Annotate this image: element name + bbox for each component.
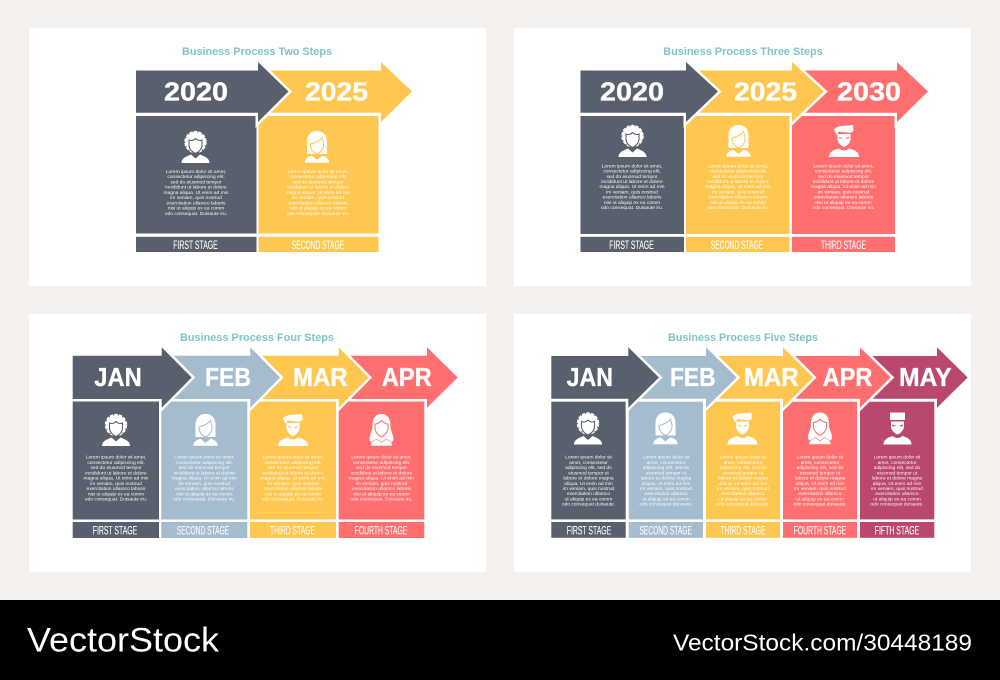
step card: second stage [629,402,703,538]
body text: Lorem ipsum dolor sit amet, [86,455,146,461]
icon: curly hair person [182,132,210,163]
body text: im veniam, quis nostrud [606,189,658,195]
body text: odo consequat duisaute. [716,502,770,508]
body text: odo consequat. Duisaute iru. [165,211,227,217]
footer bar [0,600,1000,680]
body text: exercitation ullamco laboris [288,200,348,206]
body text: amet, consectetur [569,460,608,466]
body text: sed do eiusmod tempor [606,174,658,180]
arrow: 2020 [580,62,718,122]
body text: consectetur adipiscing elit, [815,169,872,175]
body text: aliqua. Ut enim ad min [564,481,613,487]
body text: sed do eiusmod tempor [90,465,142,471]
body text: ut aliquip ex ea comm [565,496,612,502]
stage label: FOURTH STAGE [355,524,407,538]
body text: nisi ut aliquip ex ea comm [290,206,346,212]
body text: odo consequat. Duisaute iru. [707,205,769,211]
body text: labore et dolore magna [563,476,614,482]
body text: aliqua. Ut enim ad min [642,481,691,487]
arrow: APR: APR [382,364,432,392]
title: two steps: Business Process Two Steps [182,46,332,58]
body text: eiusmod tempor ut [877,470,918,476]
body text: magna aliqua. Ut enim ad min [706,184,771,190]
icon: man with flat top [884,412,912,444]
arrow: APR: APR [823,364,872,392]
body text: sed do eiusmod tempor [179,465,230,471]
body text: eiusmod tempor ut [646,470,687,476]
title: four steps: Business Process Four Steps [180,332,334,344]
body text: exercitation ullamco [875,491,919,497]
body text: consectetur adipiscing elit, [603,169,661,175]
arrow: MAR [250,347,368,408]
body text: exercitation ullamco laboris [264,486,323,492]
step card: second stage [258,116,378,252]
arrow: JAN [551,347,659,408]
body text: adipiscing elit, sed do [643,465,690,471]
body text: im veniam, quis nostrud [356,481,408,487]
body text: Lorem ipsum dolor sit amet, [602,163,662,169]
body text: exercitation ullamco laboris [602,195,662,201]
body text: aliqua. Ut enim ad min [873,481,922,487]
body text: exercitation ullamco [644,491,688,497]
body text: sed do eiusmod tempor [267,465,319,471]
body text: magna aliqua. Ut enim ad min [811,184,876,190]
icon: curly hair person [102,415,130,446]
body text: magna aliqua. Ut enim ad min [164,190,229,196]
arrow: JAN: JAN [94,364,142,392]
body text: odo consequat. Duisaute iru. [601,205,663,211]
stage label: SECOND STAGE [639,524,692,538]
body text: ut aliquip ex ea comm [873,496,921,502]
arrow: MAR: MAR [744,364,799,392]
body text: consectetur adipiscing elit, [709,169,767,175]
title: three steps: Business Process Three Steps [663,46,823,58]
body text: exercitation ullamco laboris [814,195,874,201]
body text: exercitation ullamco [798,491,842,497]
arrow: MAR [706,347,813,408]
body text: im veniam, quis nostrud [292,195,344,201]
body text: incididunt ut labore et dolore [262,470,324,476]
step card: second stage [161,402,247,538]
body text: amet, consectetur [724,460,763,466]
stage label: FIRST STAGE [567,524,611,538]
body text: aliqua. Ut enim ad min [719,481,768,487]
step card: first stage [136,116,256,252]
body text: im veniam, quis nostrud [170,195,222,201]
body text: sed do eiusmod tempor [818,174,869,180]
body text: odo consequat duisaute. [562,502,615,508]
body text: odo consequat. Duisaute iru. [350,497,413,503]
body text: nisi ut aliquip ex ea comm [604,200,660,206]
body text: odo consequat. Duisaute iru. [812,205,875,211]
body text: magna aliqua. Ut enim ad min [600,184,665,190]
body text: labore et dolore magna [872,476,922,482]
step card: third stage [706,402,780,538]
body text: incididunt ut labore et dolore [287,185,349,191]
body text: exercitation ullamco [721,491,765,497]
footer image id: VectorStock.com/30448189 [673,630,972,656]
body text: magna aliqua. Ut enim ad min [349,476,414,482]
body text: consectetur adipiscing elit, [87,460,145,466]
body text: im veniam, quis nostrud [717,486,769,492]
body text: Lorem ipsum dolor sit [643,455,690,461]
arrow: MAY [860,347,968,408]
body text: ut aliquip ex ea comm [796,496,844,502]
body text: amet, consectetur [801,460,840,466]
body text: nisi ut aliquip ex ea comm [168,206,224,212]
title: five steps: Business Process Five Steps [668,332,818,344]
body text: odo consequat. Duisaute iru. [85,497,147,503]
step card: first stage [580,116,684,252]
panel: Business Process Five Steps [514,314,971,572]
body text: adipiscing elit, sed do [874,465,921,471]
body text: consectetur adipiscing elit, [176,460,233,466]
body text: nisi ut aliquip ex ea comm [353,491,410,497]
body text: exercitation ullamco laboris [175,486,234,492]
icon: curly hair person [618,126,646,157]
body text: consectetur adipiscing elit, [289,174,347,180]
body text: Lorem ipsum dolor sit amet, [166,169,226,175]
body text: exercitation ullamco [567,491,610,497]
stage label: FIRST STAGE [609,238,654,252]
body text: odo consequat duisaute. [793,502,847,508]
body text: odo consequat duisaute. [870,502,924,508]
arrow: FEB: FEB [205,364,251,392]
body text: im veniam, quis nostrud [563,486,615,492]
footer logo text: VectorStock [27,622,220,660]
stage label: FIRST STAGE [173,238,218,252]
body text: nisi ut aliquip ex ea comm [815,200,872,206]
body text: nisi ut aliquip ex ea comm [710,200,766,206]
stage label: SECOND STAGE [711,238,763,252]
body text: eiusmod tempor ut [568,470,609,476]
body text: Lorem ipsum dolor sit amet, [813,163,874,169]
icon: long hair woman [726,125,751,157]
arrow: FEB [628,347,737,408]
body text: labore et dolore magna [718,476,768,482]
body text: nisi ut aliquip ex ea comm [265,491,321,497]
body text: im veniam, quis nostrud [267,481,319,487]
body text: sed do eiusmod tempor [292,179,344,185]
body text: ut aliquip ex ea comm [642,496,690,502]
body text: aliqua. Ut enim ad min [796,481,845,487]
body text: incididunt ut labore et dolore [601,179,663,185]
step card: fourth stage [783,402,857,538]
arrow: 2025: 2025 [305,78,368,106]
body text: consectetur adipiscing elit, [264,460,322,466]
body text: labore et dolore magna [641,476,691,482]
body text: labore et dolore magna [795,476,845,482]
step card: third stage [792,116,895,252]
body text: odo consequat. Duisaute iru. [262,497,324,503]
body text: exercitation ullamco laboris [708,195,768,201]
body text: im veniam, quis nostrud [794,486,846,492]
body text: Lorem ipsum dolor sit [874,455,921,461]
body text: incididunt ut labore et dolore [813,179,874,185]
step card: first stage [551,402,626,538]
body text: magna aliqua. Ut enim ad min [172,476,237,482]
body text: exercitation ullamco laboris [86,486,146,492]
arrow: 2025 [258,62,412,122]
body text: im veniam, quis nostrud [640,486,692,492]
arrow: MAR: MAR [293,364,348,392]
body text: Lorem ipsum dolor sit amet, [708,163,768,169]
body text: Lorem ipsum dolor sit amet, [263,455,323,461]
body text: sed do eiusmod tempor [170,179,222,185]
arrow: JAN: JAN [567,364,613,392]
body text: Lorem ipsum dolor sit [565,455,613,461]
stage label: SECOND STAGE [177,524,229,538]
body text: magna aliqua. Ut enim ad min [84,476,149,482]
icon: wavy long hair woman [370,414,394,446]
step card: fourth stage [339,402,424,538]
panel: Business Process Four Steps [29,314,486,572]
body text: incididunt ut labore et dolore [85,470,147,476]
body text: Lorem ipsum dolor sit [720,455,767,461]
arrow: APR [783,347,891,408]
stage label: FIFTH STAGE [875,524,919,538]
body text: consectetur adipiscing elit, [353,460,410,466]
body text: magna aliqua. Ut enim ad min [261,476,326,482]
body text: adipiscing elit, sed do [565,465,612,471]
body text: im veniam, quis nostrud [178,481,230,487]
body text: consectetur adipiscing elit, [167,174,225,180]
body text: magna aliqua. Ut enim ad min [286,190,351,196]
icon: long hair woman [304,131,330,163]
arrow: 2030: 2030 [837,78,901,106]
body text: amet, consectetur [878,460,917,466]
arrow: APR [339,347,458,408]
arrow: MAY: MAY [899,364,952,392]
arrow: JAN [73,347,192,408]
stage label: THIRD STAGE [270,524,315,538]
arrow: FEB: FEB [670,364,716,392]
icon: curly hair person [574,413,602,444]
panel: Business Process Two Steps [29,28,486,286]
body text: odo consequat. Duisaute iru. [287,211,349,217]
body text: exercitation ullamco laboris [352,486,412,492]
body text: sed do eiusmod tempor [356,465,407,471]
stage label: THIRD STAGE [720,524,766,538]
body text: nisi ut aliquip ex ea comm [88,491,144,497]
body text: adipiscing elit, sed do [797,465,844,471]
body text: im veniam, quis nostrud [90,481,142,487]
step card: second stage [686,116,790,252]
body text: incididunt ut labore et dolore [351,470,412,476]
body text: im veniam, quis nostrud [818,189,870,195]
icon: wavy long hair woman [808,412,832,444]
body text: nisi ut aliquip ex ea comm [176,491,232,497]
body text: incididunt ut labore et dolore [174,470,235,476]
body text: Lorem ipsum dolor sit [797,455,844,461]
icon: long hair woman [193,414,218,446]
stage label: FIRST STAGE [93,524,137,538]
step card: fifth stage [860,402,934,538]
step card: first stage [73,402,159,538]
body text: Lorem ipsum dolor sit amet, [351,455,412,461]
body text: incididunt ut labore et dolore [707,179,769,185]
icon: long hair woman [653,412,678,444]
arrow: FEB [162,347,280,408]
body text: amet, consectetur [647,460,686,466]
body text: incididunt ut labore et dolore [165,185,227,191]
icon: man with quiff [829,125,859,157]
body text: Lorem ipsum dolor sit amet, [288,169,348,175]
body text: exercitation ullamco laboris [166,200,226,206]
arrow: 2020: 2020 [600,78,664,106]
panel: Business Process Three Steps [514,28,971,286]
body text: Lorem ipsum dolor sit amet, [174,455,234,461]
step card: third stage [250,402,336,538]
body text: odo consequat. Duisaute iru. [173,497,235,503]
arrow: 2025 [686,62,824,122]
body text: ut aliquip ex ea comm [719,496,767,502]
body text: odo consequat duisaute. [639,502,693,508]
stage label: THIRD STAGE [821,238,866,252]
arrow: 2025: 2025 [734,78,797,106]
icon: man with quiff [728,412,758,444]
body text: im veniam, quis nostrud [712,189,764,195]
body text: im veniam, quis nostrud [871,486,923,492]
stage label: SECOND STAGE [292,238,344,252]
arrow: 2030 [792,62,928,122]
body text: eiusmod tempor ut [800,470,841,476]
arrow: 2020: 2020 [164,78,228,106]
body text: sed do eiusmod tempor [712,174,764,180]
icon: man with quiff [278,414,308,446]
body text: adipiscing elit, sed do [720,465,767,471]
arrow: 2020 [136,62,288,122]
stage label: FOURTH STAGE [794,524,846,538]
body text: eiusmod tempor ut [723,470,764,476]
